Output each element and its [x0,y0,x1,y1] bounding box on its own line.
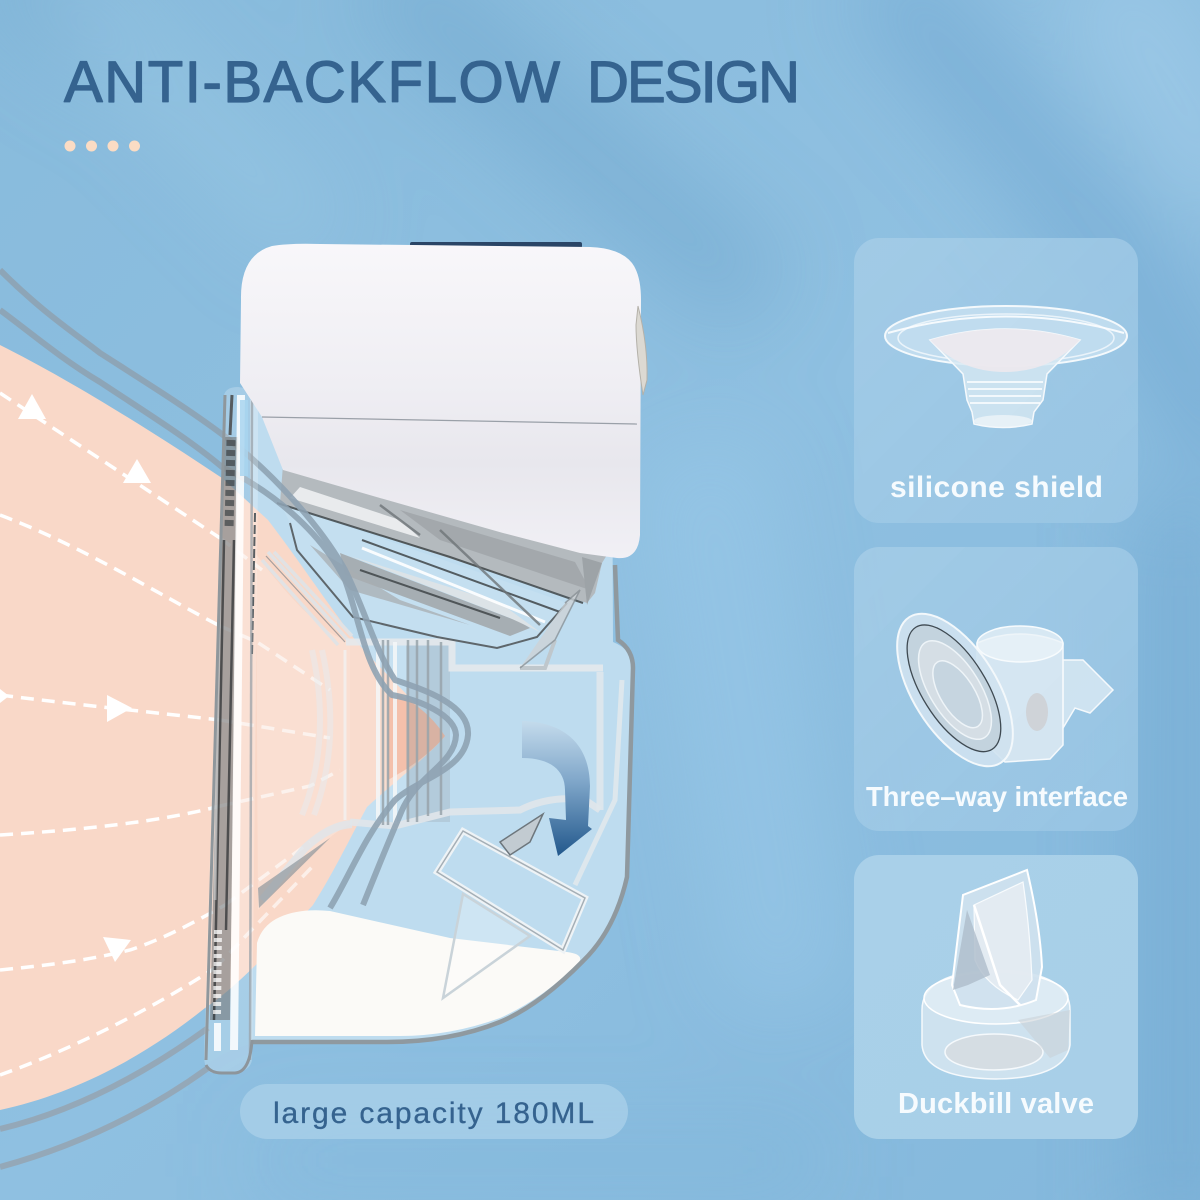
icon: duckbill valve [922,870,1070,1079]
milk flow dashed lines [0,393,225,1075]
icon: silicone shield [885,306,1127,428]
pump outer wall [252,565,633,1042]
membrane bowl under motor [277,465,610,668]
upper wave lines [0,270,468,908]
capacity pill [240,1084,628,1139]
title: DESIGN [587,50,800,115]
flow arrowheads [0,394,151,962]
panel: duckbill valve [854,855,1138,1139]
motor head [240,242,647,558]
title [64,50,800,115]
panel: three-way interface [854,547,1138,831]
panel: three-way interface: Three–way interface [866,781,1128,812]
duckbill valve in chamber [437,814,585,998]
breast silhouette [0,345,445,1110]
panel: silicone shield: silicone shield [890,471,1103,504]
three-way tube [346,640,622,885]
pump body interior [250,400,633,1042]
flange column [204,387,258,1073]
decorative title dots [64,140,140,152]
icon: three-way interface [874,595,1113,785]
title: ANTI-BACKFLOW [64,50,560,115]
lower wave lines [0,1028,208,1167]
panel: silicone shield [854,238,1138,523]
milk [255,910,580,1036]
panel: duckbill valve: Duckbill valve [898,1088,1094,1120]
faint dashes inside shield [215,538,340,968]
breast shield funnel [256,552,352,910]
capacity pill: large capacity 180ML [273,1097,594,1130]
backflow arrow [522,721,592,856]
nipple tint [388,690,445,780]
